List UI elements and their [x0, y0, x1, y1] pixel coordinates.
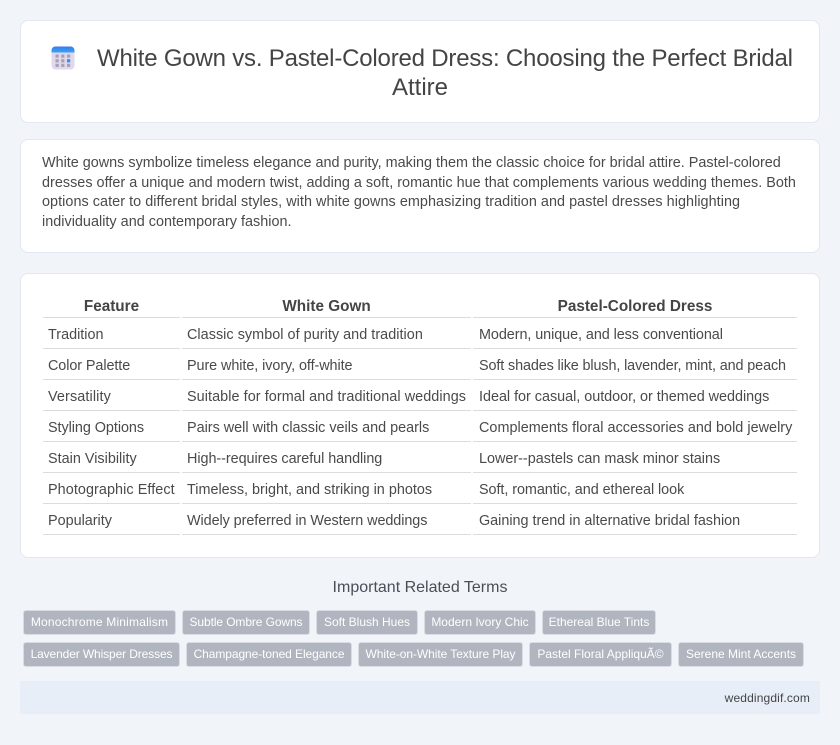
tag: Serene Mint Accents	[686, 647, 796, 661]
tag	[542, 610, 656, 635]
heading: related terms: Important Related Terms	[333, 579, 507, 596]
row: Stain Visibility: High--requires careful handling	[187, 451, 382, 467]
tag	[678, 642, 804, 667]
tag	[529, 642, 672, 667]
tag	[358, 642, 523, 667]
tag	[424, 610, 536, 635]
text block: introduction: individuality and contemporary fashion.	[42, 214, 292, 230]
row: Color Palette: Color Palette	[48, 358, 130, 374]
tag: Champagne-toned Elegance	[194, 647, 344, 661]
row: Stain Visibility: Lower--pastels can mask minor stains	[479, 451, 720, 467]
row: Stain Visibility: Stain Visibility	[48, 451, 137, 467]
tag	[23, 642, 180, 667]
panel: introduction	[20, 139, 820, 253]
row: Styling Options: Complements floral accessories and bold jewelry	[479, 420, 792, 436]
tag: White-on-White Texture Play	[366, 647, 515, 661]
row: Photographic Effect: Timeless, bright, and striking in photos	[187, 482, 432, 498]
row: Styling Options: Pairs well with classic veils and pearls	[187, 420, 429, 436]
row: Popularity: Popularity	[48, 513, 112, 529]
footer text: weddingdif.com	[725, 691, 810, 705]
row: Tradition	[48, 327, 723, 343]
tag	[182, 610, 310, 635]
row: Tradition: Classic symbol of purity and tradition	[187, 327, 423, 343]
footer bar	[20, 681, 820, 714]
text block: introduction: dresses offer a unique and modern twist, adding a soft, romantic hue that complements various wedding themes. Both	[42, 174, 796, 190]
row: Popularity: Widely preferred in Western weddings	[187, 513, 427, 529]
row: Photographic Effect: Photographic Effect	[48, 482, 175, 498]
tag: Pastel Floral AppliquÃ©	[537, 647, 664, 661]
tag: Modern Ivory Chic	[431, 615, 529, 629]
row: Versatility: Versatility	[48, 389, 111, 405]
row: Color Palette	[48, 358, 786, 374]
tag: Soft Blush Hues	[324, 615, 410, 629]
panel: comparison table	[20, 273, 820, 558]
row: Tradition: Modern, unique, and less conventional	[479, 327, 723, 343]
tag: Ethereal Blue Tints	[549, 615, 649, 629]
tag: Monochrome Minimalism	[31, 615, 168, 629]
row: Versatility	[48, 389, 769, 405]
row: Styling Options	[48, 420, 792, 436]
tag: Subtle Ombre Gowns	[190, 615, 302, 629]
table header: Feature: Feature	[84, 298, 139, 315]
row: Versatility: Ideal for casual, outdoor, or themed weddings	[479, 389, 769, 405]
tag	[186, 642, 352, 667]
tag: Lavender Whisper Dresses	[31, 647, 172, 661]
text block: introduction: options cater to different bridal styles, with white gowns emphasizing tradition and pastel dresses highlighting	[42, 194, 740, 210]
title: White Gown vs. Pastel-Colored Dress: Choosing the Perfect Bridal	[97, 45, 793, 72]
tag	[316, 610, 418, 635]
tag	[23, 610, 176, 635]
title	[97, 45, 793, 101]
text block: introduction: White gowns symbolize timeless elegance and purity, making them the classic choice for bridal attire. Pastel-colored	[42, 155, 781, 171]
row: Popularity: Gaining trend in alternative bridal fashion	[479, 513, 740, 529]
row: Versatility: Suitable for formal and traditional weddings	[187, 389, 466, 405]
icon: calendar	[52, 46, 74, 70]
row: Color Palette: Pure white, ivory, off-white	[187, 358, 352, 374]
table header: White Gown: White Gown	[282, 298, 371, 315]
row: Photographic Effect	[48, 482, 684, 498]
row: Photographic Effect: Soft, romantic, and ethereal look	[479, 482, 684, 498]
row: Color Palette: Soft shades like blush, lavender, mint, and peach	[479, 358, 786, 374]
row: Styling Options: Styling Options	[48, 420, 144, 436]
row: Stain Visibility	[48, 451, 720, 467]
title: Attire	[392, 74, 448, 101]
row: Popularity	[48, 513, 740, 529]
panel: title header	[20, 20, 820, 123]
text block: introduction	[42, 155, 796, 230]
table header: Pastel-Colored Dress: Pastel-Colored Dress	[558, 298, 712, 315]
row: Tradition: Tradition	[48, 327, 104, 343]
tag group: related terms	[23, 610, 804, 667]
